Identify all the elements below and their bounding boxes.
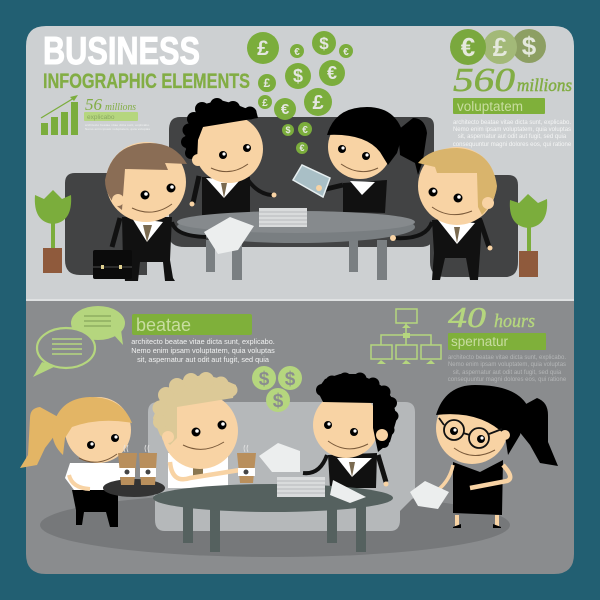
table: bottom scene (153, 477, 393, 552)
money coins cluster: $ (293, 66, 303, 86)
person: woman with tablet (293, 107, 427, 213)
coffee cups (118, 445, 157, 485)
stat: 560 millions (453, 62, 572, 99)
money coins cluster: £ (262, 98, 268, 109)
paper stack (277, 477, 325, 497)
title (43, 30, 250, 93)
coffee cup (237, 445, 256, 483)
text block: top right: architecto beatae vitae dicta sunt, explicabo. (453, 120, 571, 126)
text block: spernatur: Nemo enim ipsam voluptatem, quia voluptas (448, 362, 566, 368)
floor shadow (40, 493, 510, 557)
paper: bottom scene left (259, 443, 300, 472)
text block: spernatur: consequuntur magni dolores eos, qui ratione (448, 377, 567, 383)
plant: left (35, 190, 71, 273)
three big coins: £ (493, 32, 508, 62)
money coins cluster: $ (285, 125, 291, 135)
tablet (293, 165, 330, 197)
sofa: back (169, 117, 434, 247)
paper: top scene (204, 217, 254, 254)
sofa: right (430, 175, 518, 277)
text block: beatae: architecto beatae vitae dicta sunt, explicabo. (131, 337, 275, 346)
panel: bottom cafe scene (20, 301, 574, 574)
stat: 56 millions: explicabo (87, 114, 115, 121)
sofa: light (148, 402, 415, 531)
person: woman with glasses (436, 385, 558, 528)
money coins cluster: € (281, 101, 290, 118)
text block: spernatur (448, 355, 567, 383)
glasses (439, 418, 502, 448)
sofa: left (65, 173, 147, 275)
label: spernatur: spernatur (451, 334, 509, 349)
money coins cluster: € (294, 47, 300, 58)
person: curly man top (181, 98, 276, 215)
stat: 40 hours (448, 302, 535, 334)
money coins cluster: £ (264, 76, 271, 90)
speech bubbles icon (33, 306, 125, 377)
money coins cluster: £ (257, 37, 269, 60)
network icon (371, 309, 441, 364)
paper: held by woman (410, 481, 449, 509)
dollar coins: $ (273, 391, 284, 412)
text block: spernatur: architecto beatae vitae dicta sunt, explicabo. (448, 355, 566, 361)
tray (103, 479, 165, 497)
money coins cluster: € (302, 125, 308, 136)
paper stack (259, 208, 307, 227)
dollar coins (252, 366, 302, 412)
stat: 560 millions: 560 (453, 62, 515, 99)
text block: top right (453, 120, 572, 148)
panel: top office scene (26, 26, 574, 301)
text block: spernatur: sit, aspernatur aut odit aut fugit, sed quia (453, 370, 562, 376)
person: brown hair man (93, 142, 206, 281)
person: curly man bottom (303, 372, 398, 488)
text block: beatae: sit, aspernatur aut odit aut fugit, sed quia (137, 355, 270, 364)
text block: top right: Nemo enim ipsam voluptatem, quia voluptas (453, 127, 571, 133)
stat: 560 millions: millions (517, 75, 572, 95)
plant: right (510, 194, 547, 277)
money coins cluster: € (327, 63, 337, 83)
dollar coins: $ (259, 369, 270, 390)
stat: 56 millions (84, 95, 150, 131)
person: curly blond man (152, 372, 256, 488)
stat: 56 millions: 56 (85, 95, 102, 114)
money coins cluster: € (343, 47, 349, 58)
three big coins: $ (522, 31, 537, 61)
label: beatae: beatae (136, 315, 191, 335)
text block: beatae: Nemo enim ipsam voluptatem, quia voluptas (131, 346, 275, 355)
title: INFOGRAPHIC ELEMENTS (43, 70, 250, 93)
stat: 56 millions: Nemo enim ipsam voluptatem, quia voluptas (85, 127, 150, 131)
title: BUSINESS (43, 30, 200, 73)
label: spernatur (448, 333, 546, 350)
text block: top right: sit, aspernatur aut odit aut fugit, sed quia (458, 134, 567, 140)
stat: 40 hours: hours (494, 311, 535, 332)
stat: 56 millions: architecto beatae vitae dicta sunt, explicabo. (85, 123, 150, 127)
money coins cluster: £ (312, 92, 324, 114)
person: waitress (20, 397, 165, 527)
table: top scene (177, 208, 415, 280)
dollar coins: $ (285, 369, 296, 390)
money coins cluster: € (299, 143, 305, 153)
money coins cluster (247, 31, 353, 154)
bar chart icon (41, 95, 78, 135)
briefcase (93, 250, 132, 279)
label: voluptatem: voluptatem (457, 99, 523, 114)
stat: 40 hours: 40 (448, 302, 487, 334)
text block: top right: consequuntur magni dolores eos, qui ratione (453, 142, 572, 148)
text block: beatae (131, 337, 275, 364)
three big coins: € (461, 32, 475, 62)
paper on table (330, 480, 366, 503)
three big coins (450, 29, 546, 65)
stat: 56 millions: millions (105, 102, 136, 113)
person: blond man (390, 147, 497, 280)
money coins cluster: $ (319, 34, 329, 53)
label: voluptatem (453, 98, 545, 114)
label: beatae (132, 314, 252, 335)
